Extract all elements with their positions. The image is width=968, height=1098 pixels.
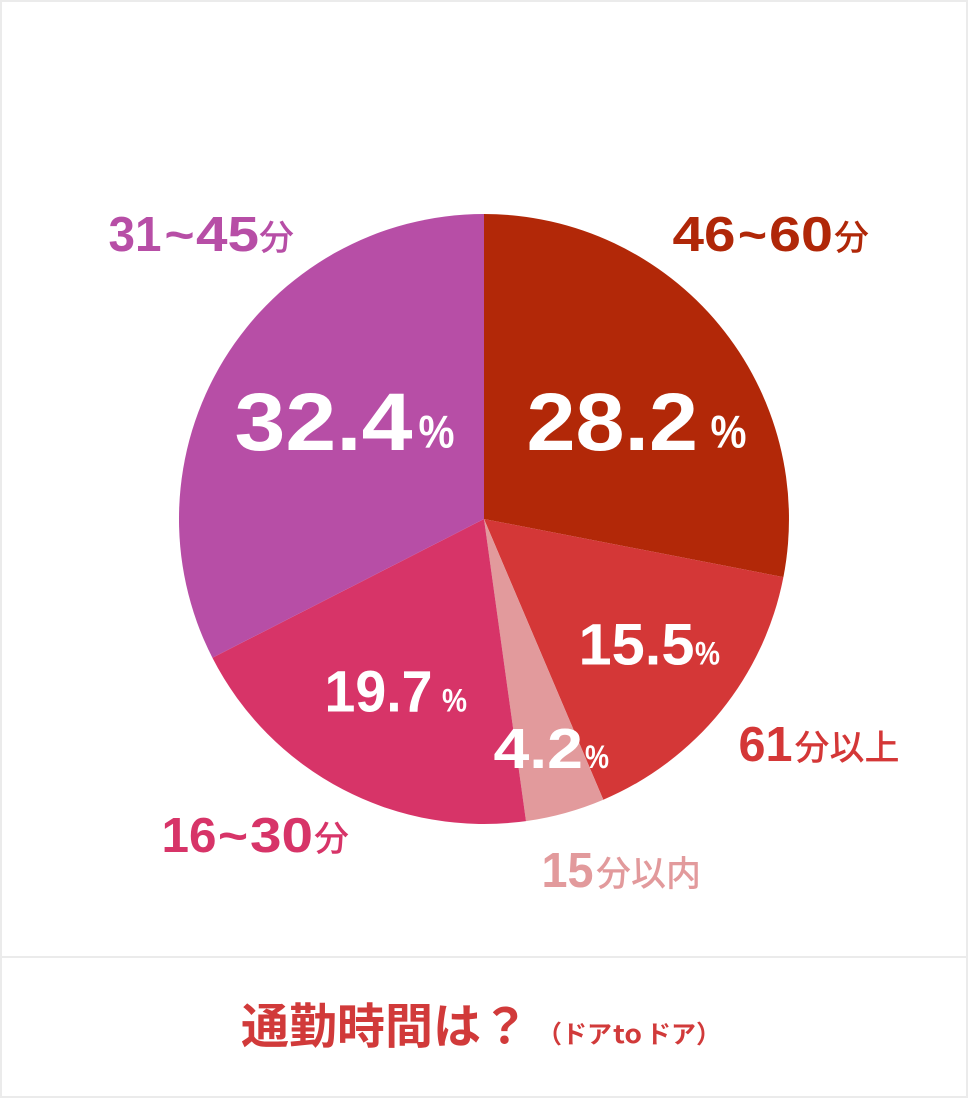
caption: （ドア <box>537 1015 612 1051</box>
slice: 15分以内 4.2% <box>484 519 603 821</box>
caption: 通勤時間は？ <box>241 987 529 1057</box>
slice: 16~30分 19.7% <box>212 519 526 824</box>
value: 19.7%: 19.7 <box>324 660 432 724</box>
label: 31~45分: 45 <box>196 208 259 262</box>
label: 16~30分 <box>162 809 349 863</box>
value: 4.2%: 4.2 <box>494 717 583 781</box>
value: 4.2% <box>494 717 609 781</box>
label: 16~30分: ~ <box>218 809 248 862</box>
label: 46~60分: ~ <box>738 208 767 261</box>
value: 32.4%: % <box>418 406 454 458</box>
caption: ドア） <box>646 1015 721 1051</box>
label: 46~60分: 分 <box>834 219 869 258</box>
slice: 46~60分 28.2% <box>484 214 789 577</box>
label: 46~60分: 46 <box>672 208 736 262</box>
label: 16~30分: 16 <box>162 809 216 863</box>
value: 19.7%: % <box>442 682 467 718</box>
label: 16~30分: 分 <box>314 820 349 859</box>
label: 15分以内 <box>542 844 701 898</box>
value: 4.2%: % <box>585 739 609 775</box>
caption: to <box>613 1015 642 1051</box>
label: 61分以上: 61 <box>738 718 792 772</box>
label: 61分以上 <box>738 718 900 772</box>
label: 15分以内: 15 <box>542 844 594 898</box>
label: 61分以上: 分以上 <box>794 729 900 768</box>
value: 15.5%: 15.5 <box>578 612 694 678</box>
caption <box>241 987 721 1057</box>
label: 46~60分 <box>672 208 869 262</box>
label: 46~60分: 60 <box>769 208 833 262</box>
value: 15.5%: % <box>695 636 720 672</box>
slice: 31~45分 32.4% <box>179 214 484 658</box>
label: 31~45分 <box>108 208 294 262</box>
label: 31~45分: ~ <box>164 208 194 261</box>
value: 28.2%: % <box>710 406 746 458</box>
label: 31~45分: 31 <box>108 208 162 262</box>
slice: 61分以上 15.5% <box>484 519 783 800</box>
label: 16~30分: 30 <box>250 809 313 863</box>
value: 32.4%: 32.4 <box>234 377 413 468</box>
value: 28.2%: 28.2 <box>526 377 698 468</box>
label: 15分以内: 分以内 <box>596 855 701 894</box>
pie chart <box>179 214 789 824</box>
label: 31~45分: 分 <box>259 219 294 258</box>
